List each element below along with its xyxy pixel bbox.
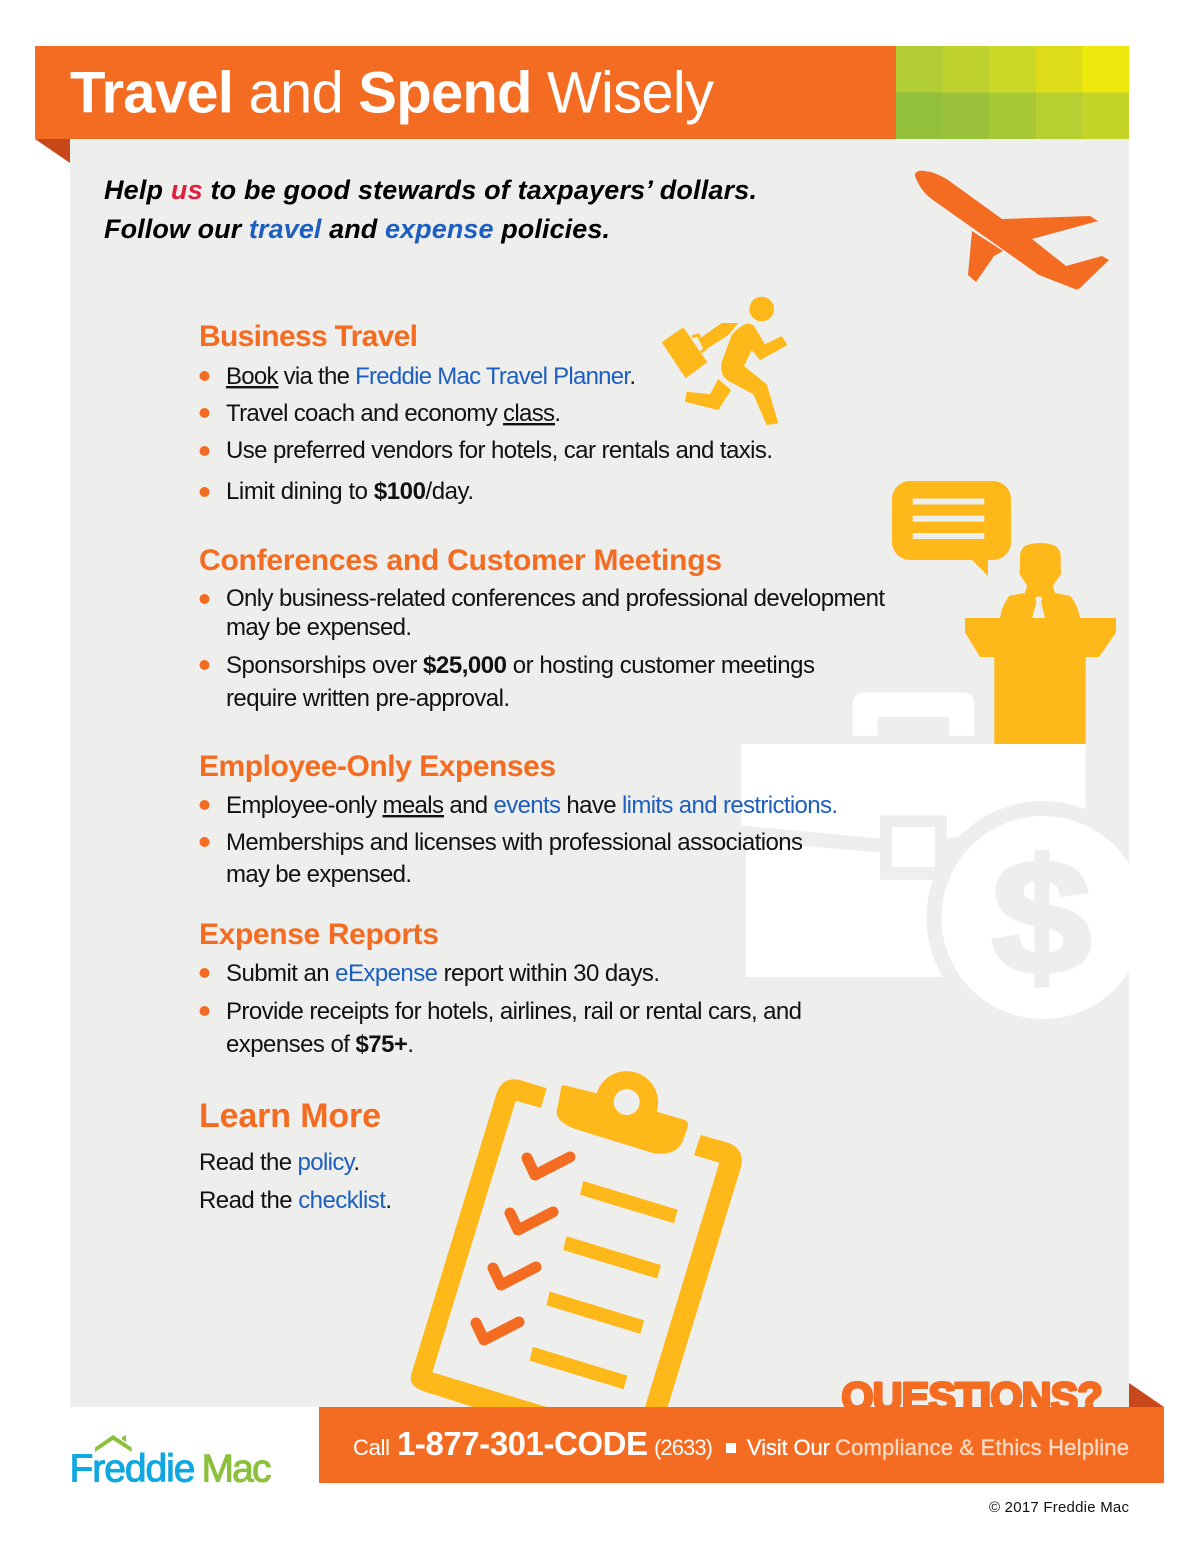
Freddie Mac logo — [70, 1435, 272, 1491]
footer contact bar: 1-877-301-CODE — [397, 1425, 648, 1462]
intro text: Help us to be good stewards of taxpayers’ dollars. — [104, 175, 757, 205]
Freddie Mac logo: Mac — [202, 1448, 272, 1491]
section: conferences and customer meetings: may be expensed. — [226, 614, 412, 641]
section: conferences and customer meetings: Sponsorships over $25,000 or hosting customer meetings — [226, 652, 815, 679]
footer contact bar: Visit Our — [747, 1435, 830, 1460]
section: learn more: Read the checklist. — [199, 1187, 392, 1214]
section: employee-only expenses: Memberships and licenses with professional associations — [226, 829, 803, 856]
section: conferences and customer meetings: require written pre-approval. — [226, 685, 510, 712]
section: employee-only expenses: Employee-only meals and events have limits and restrictions. — [226, 792, 838, 819]
colour squares — [896, 46, 1129, 139]
heading: employee-only: Employee-Only Expenses — [199, 750, 556, 783]
footer fold — [1129, 1383, 1164, 1407]
section: conferences and customer meetings — [199, 544, 885, 712]
heading: expense reports: Expense Reports — [199, 918, 439, 951]
page panel background — [70, 139, 1129, 1407]
header banner — [35, 46, 1129, 139]
section: business travel: Use preferred vendors for hotels, car rentals and taxis. — [226, 437, 773, 464]
heading: learn more: Learn More — [199, 1097, 381, 1135]
section: business travel — [199, 320, 773, 505]
copyright: © 2017 Freddie Mac — [989, 1499, 1130, 1516]
icon: briefcase with dollar: $ — [992, 827, 1091, 1008]
intro text — [104, 175, 757, 244]
icon: briefcase with dollar — [741, 692, 1200, 1040]
section: learn more: Read the policy. — [199, 1149, 360, 1176]
icon: speech bubble — [892, 481, 1011, 576]
section: expense reports: Submit an eExpense report within 30 days. — [226, 960, 660, 987]
heading: conferences: Conferences and Customer Meetings — [199, 544, 722, 577]
heading: business travel: Business Travel — [199, 320, 418, 353]
footer contact bar: (2633) — [654, 1435, 713, 1460]
section: business travel: Limit dining to $100/day. — [226, 478, 474, 505]
footer contact bar: Call — [353, 1435, 390, 1460]
section: employee-only expenses: may be expensed. — [226, 861, 412, 888]
icon: clipboard checklist — [411, 1071, 742, 1407]
section: expense reports: Provide receipts for hotels, airlines, rail or rental cars, and — [226, 998, 802, 1025]
section: business travel: Book via the Freddie Mac Travel Planner. — [226, 363, 636, 390]
footer contact bar: Compliance & Ethics Helpline — [835, 1435, 1129, 1460]
section: conferences and customer meetings: Only business-related conferences and professional development — [226, 585, 885, 612]
intro text: Follow our travel and expense policies. — [104, 214, 610, 244]
heading: questions: QUESTIONS? — [842, 1374, 1102, 1420]
header fold — [35, 139, 70, 163]
icon: speaker at podium — [965, 543, 1116, 744]
Freddie Mac logo: Freddie — [70, 1448, 196, 1491]
section: expense reports — [199, 918, 802, 1058]
icon: running businessperson — [662, 297, 787, 425]
section: business travel: Travel coach and economy class. — [226, 400, 561, 427]
section: learn more — [199, 1097, 392, 1214]
icon: airplane — [915, 171, 1109, 289]
footer contact bar — [319, 1407, 1164, 1483]
section: employee-only expenses — [199, 750, 838, 888]
section: expense reports: expenses of $75+. — [226, 1031, 414, 1058]
title: Travel and Spend Wisely — [70, 60, 714, 126]
